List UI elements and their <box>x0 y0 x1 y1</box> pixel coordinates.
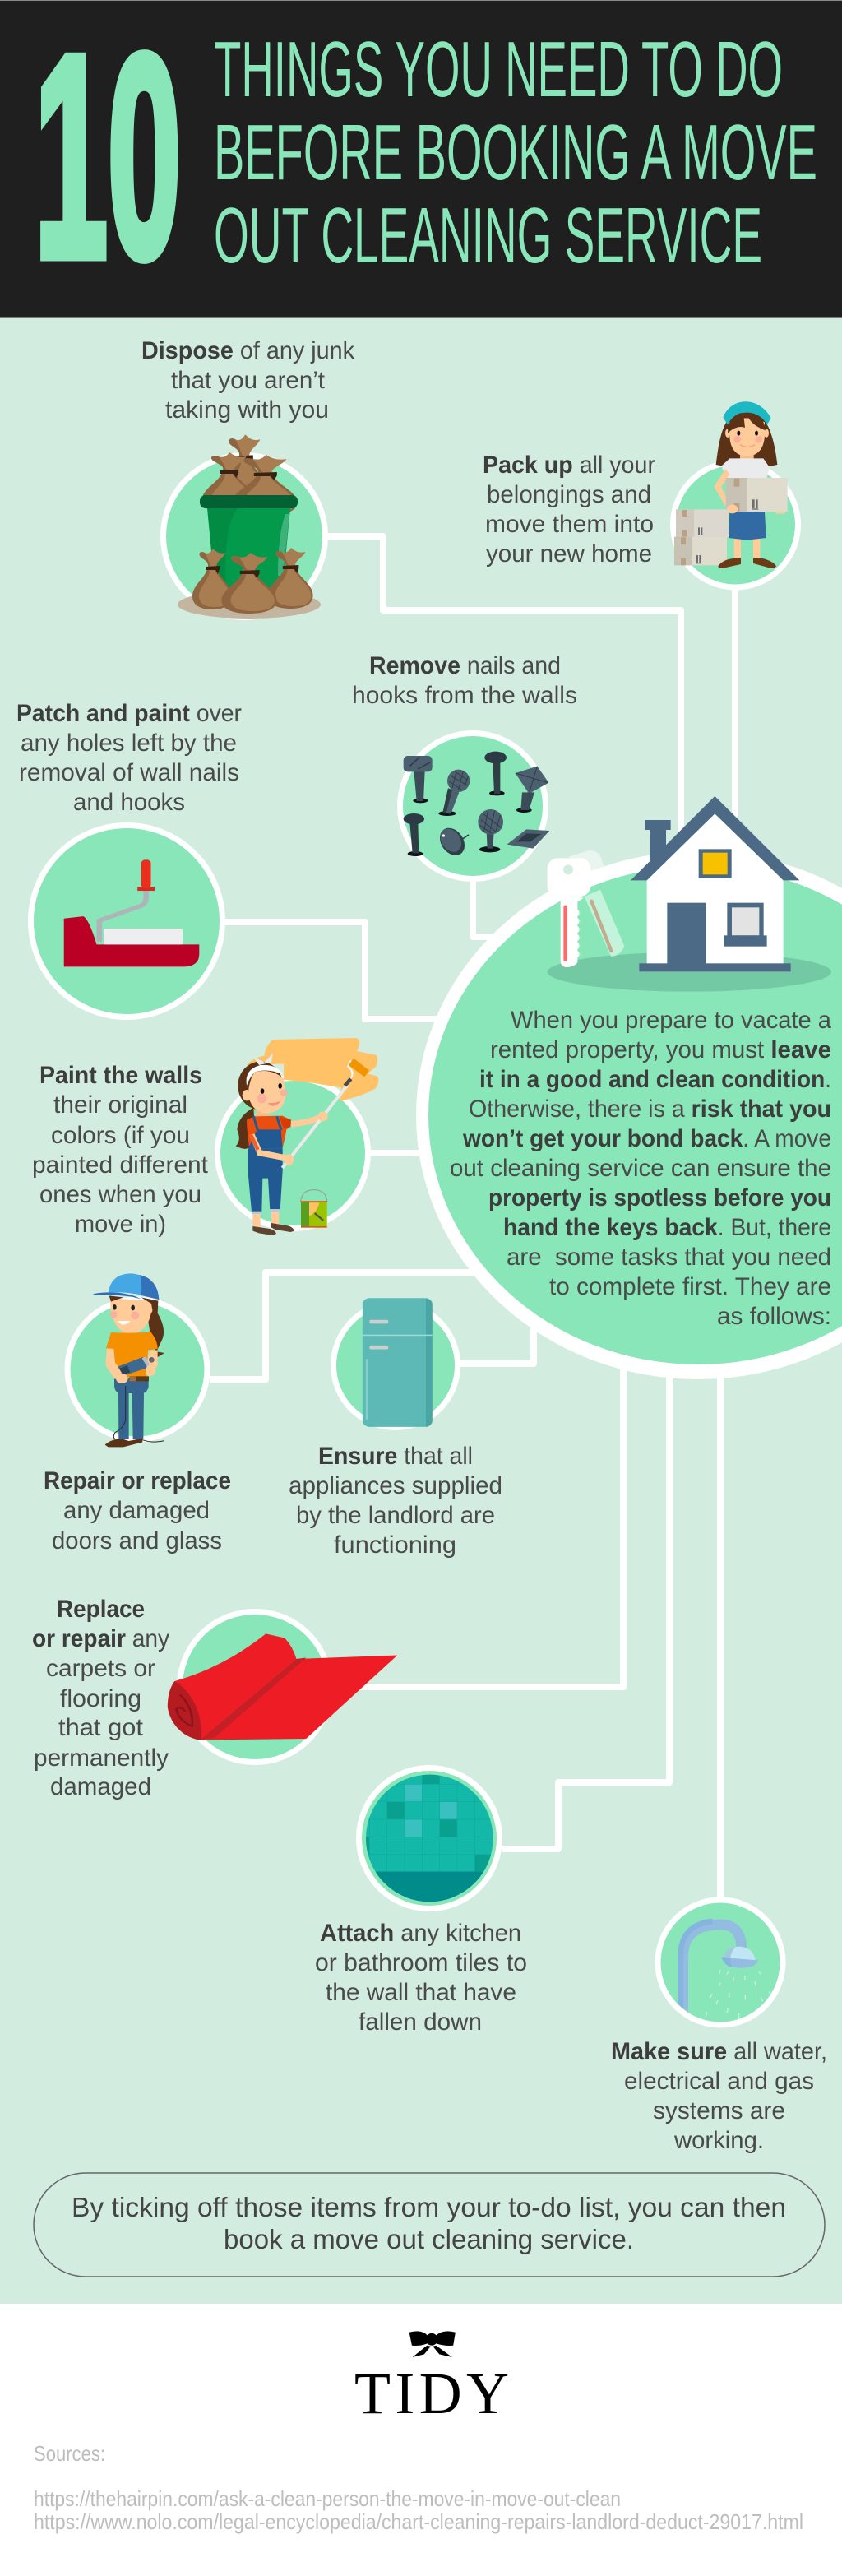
icon: front key <box>548 858 590 967</box>
callout: closing statement <box>34 2173 825 2277</box>
text: replace carpets: Replace <box>57 1596 145 1623</box>
text: replace carpets: or repair any <box>32 1625 169 1652</box>
text: pack up: move them into <box>485 511 654 538</box>
text: make sure: Make sure all water, <box>611 2038 827 2065</box>
icon: woman with drill <box>67 1273 207 1447</box>
text: intro paragraph: it in a good and clean condition. <box>479 1066 831 1093</box>
text: paint the walls: their original <box>53 1091 187 1119</box>
text: dispose: taking with you <box>165 396 329 424</box>
mint content panel <box>0 318 842 2304</box>
text: pack up: your new home <box>486 540 652 568</box>
title <box>214 25 817 280</box>
text: repair or replace: doors and glass <box>52 1527 222 1554</box>
text: make sure: working. <box>673 2127 764 2154</box>
text: intro paragraph: When you prepare to vacate a <box>511 1007 831 1034</box>
icon: roller and tray <box>31 826 222 1017</box>
sources: Sources: <box>34 2441 105 2466</box>
panel: replace carpets <box>32 1596 397 1800</box>
text: attach <box>315 1920 527 2036</box>
sources <box>34 2441 803 2534</box>
text: patch and paint: removal of wall nails <box>19 759 239 786</box>
text: remove nails <box>352 652 577 709</box>
text: replace carpets: flooring <box>60 1685 141 1712</box>
text: ensure: by the landlord are <box>296 1502 495 1529</box>
icon: woman with boxes <box>673 401 798 587</box>
icon: back key <box>569 850 624 957</box>
panel: patch and paint <box>16 700 242 1017</box>
icon: woman painting <box>217 1038 378 1235</box>
text: ensure: functioning <box>334 1531 456 1559</box>
header banner <box>0 0 842 318</box>
text: pack up: belongings and <box>487 481 651 508</box>
icon: nails and hooks <box>400 734 549 878</box>
text: replace carpets: that got <box>58 1714 144 1741</box>
panel: make sure systems work <box>611 1900 827 2154</box>
text: repair or replace: any damaged <box>63 1497 210 1524</box>
text: intro paragraph: out cleaning service can ensure the <box>450 1155 831 1182</box>
text: attach: or bathroom tiles to <box>315 1949 527 1976</box>
header banner: 10 <box>35 0 181 317</box>
icon: shower <box>658 1900 783 2025</box>
text: intro paragraph: rented property, you must leave <box>490 1036 831 1063</box>
text: patch and paint <box>16 700 242 816</box>
text: paint the walls <box>32 1062 209 1238</box>
text: patch and paint: Patch and paint over <box>16 700 242 727</box>
text: repair or replace <box>44 1467 231 1554</box>
text: patch and paint: any holes left by the <box>21 730 237 757</box>
text: attach: Attach any kitchen <box>320 1920 521 1947</box>
text: intro paragraph: to complete first. They are <box>549 1273 831 1300</box>
callout: closing statement: By ticking off those items from your to-do list, you can then <box>72 2192 786 2222</box>
panel: ensure appliances <box>289 1298 502 1559</box>
text: intro paragraph: won’t get your bond back. A move <box>462 1125 831 1152</box>
text: attach: the wall that have <box>326 1979 516 2006</box>
text: repair or replace: Repair or replace <box>44 1467 231 1494</box>
text: intro paragraph: Otherwise, there is a risk that you <box>469 1096 831 1123</box>
text: paint the walls: colors (if you <box>51 1122 190 1149</box>
panel: attach tiles <box>315 1768 527 2036</box>
text: paint the walls: painted different <box>32 1151 209 1179</box>
text: replace carpets: carpets or <box>46 1655 155 1682</box>
connector lines <box>210 536 735 1897</box>
sources: https://thehairpin.com/ask-a-clean-person-the-move-in-move-out-clean <box>34 2486 621 2511</box>
wordmark: TIDY <box>354 2361 509 2426</box>
icon: tiles <box>359 1768 500 1908</box>
icon: bow <box>409 2331 456 2357</box>
ground shadow <box>548 952 831 992</box>
text: intro paragraph: as follows: <box>717 1303 831 1330</box>
icon: trash bin and bags <box>163 434 326 619</box>
text: replace carpets <box>32 1596 169 1800</box>
logo: Tidy <box>354 2331 509 2426</box>
text: dispose: Dispose of any junk <box>141 337 355 364</box>
text: replace carpets: permanently <box>34 1744 169 1772</box>
text: intro paragraph: hand the keys back. But, there <box>503 1214 831 1241</box>
icon: fridge <box>334 1298 457 1428</box>
text: pack up <box>483 452 655 568</box>
text: intro paragraph: are some tasks that you need <box>507 1244 831 1271</box>
text: dispose: that you aren’t <box>171 367 326 394</box>
text: attach: fallen down <box>359 2008 482 2036</box>
text: paint the walls: Paint the walls <box>39 1062 202 1089</box>
text: ensure <box>289 1443 502 1559</box>
icon: keys and house <box>548 796 831 992</box>
text: paint the walls: move in) <box>75 1211 166 1238</box>
panel: repair or replace <box>44 1273 231 1554</box>
text: replace carpets: damaged <box>50 1773 151 1800</box>
text: make sure: electrical and gas <box>624 2068 814 2095</box>
panel: paint the walls <box>32 1038 378 1238</box>
icon: carpet roll <box>168 1612 397 1762</box>
text: remove nails: Remove nails and <box>369 652 561 679</box>
text: make sure: systems are <box>653 2097 785 2124</box>
central intro circle <box>416 851 842 1379</box>
panel: dispose of junk <box>141 337 355 619</box>
text: dispose <box>141 337 355 424</box>
text: patch and paint: and hooks <box>73 789 185 816</box>
text: ensure: appliances supplied <box>289 1472 502 1499</box>
panel: pack up <box>483 401 798 587</box>
text: remove nails: hooks from the walls <box>352 682 577 709</box>
text: intro paragraph <box>450 1007 831 1330</box>
text: ensure: Ensure that all <box>318 1443 473 1470</box>
callout: closing statement: book a move out cleaning service. <box>224 2224 634 2254</box>
text: paint the walls: ones when you <box>39 1181 201 1208</box>
panel: remove nails <box>352 652 577 878</box>
text: pack up: Pack up all your <box>483 452 655 479</box>
icon: house <box>631 796 799 971</box>
text: make sure <box>611 2038 827 2154</box>
